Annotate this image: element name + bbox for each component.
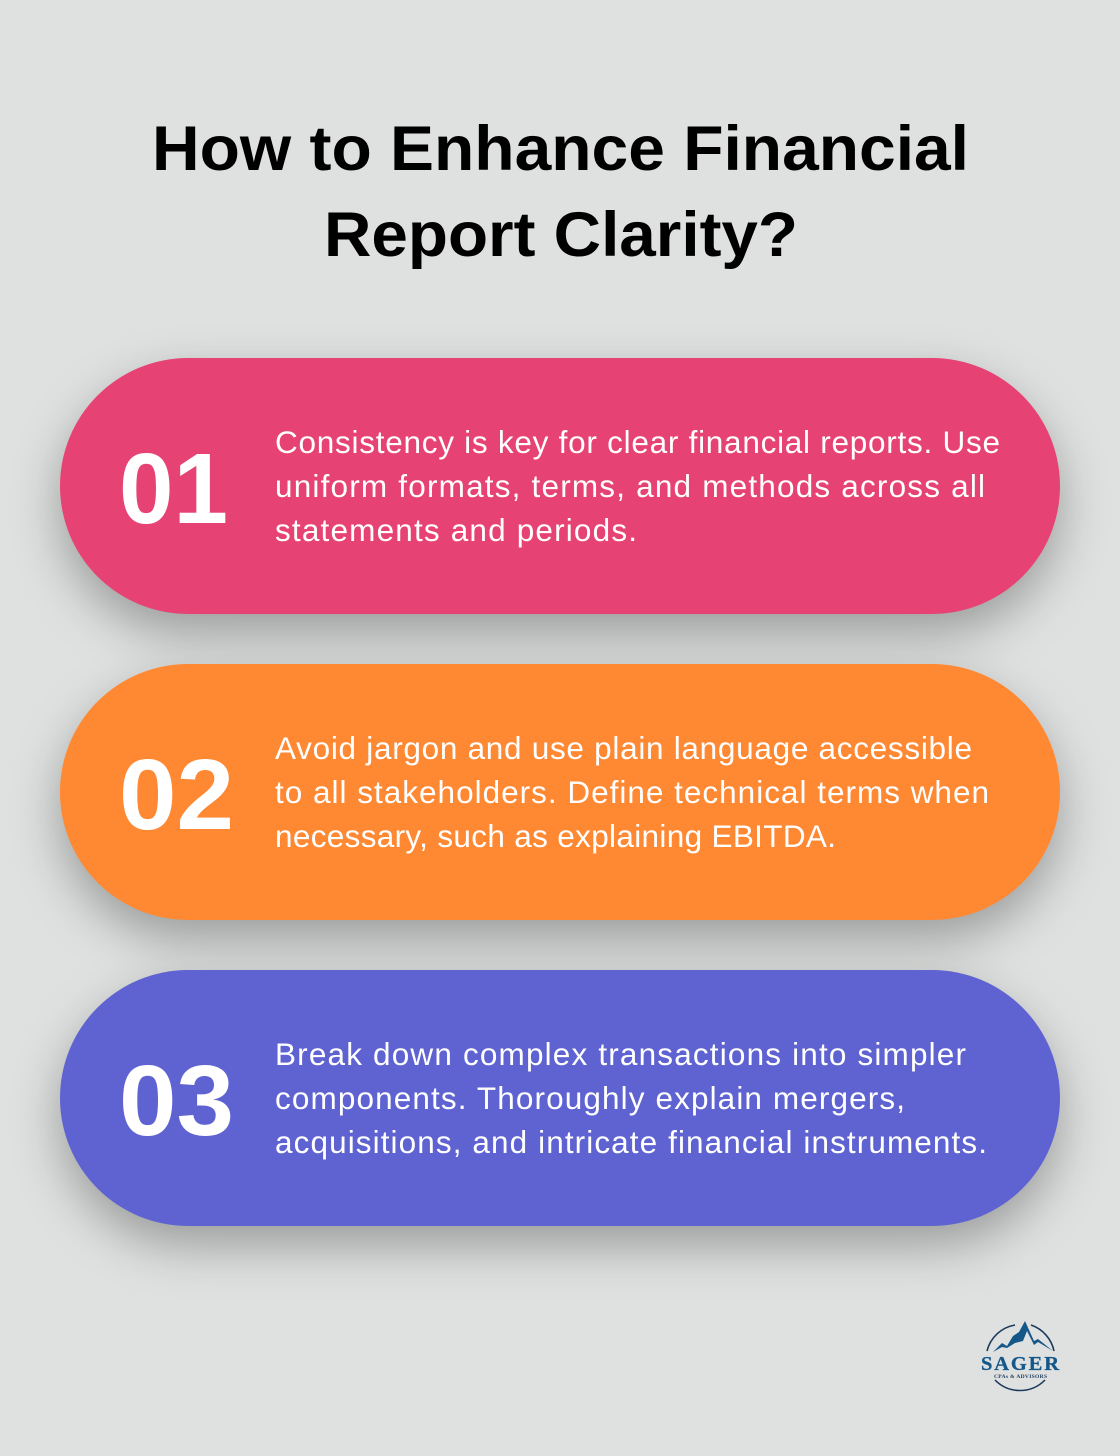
panel: step 02 plain language	[60, 664, 1060, 920]
title: Report Clarity?	[324, 200, 798, 270]
title: How to Enhance Financial	[152, 114, 969, 184]
icon: Sager logo	[981, 1321, 1059, 1391]
icon: Sager logo: SAGER	[981, 1353, 1059, 1375]
text block: step 03: components. Thoroughly explain mergers,	[275, 1080, 905, 1116]
text block: step 03: Break down complex transactions into simpler	[275, 1036, 966, 1072]
text block: step 01: uniform formats, terms, and methods across all	[275, 468, 985, 504]
text block: step 02	[275, 730, 989, 854]
panel: step 03 complex transactions	[60, 970, 1060, 1226]
number: 02: 02	[119, 739, 234, 851]
text block: step 03: acquisitions, and intricate financial instruments.	[275, 1124, 987, 1160]
text block: step 01	[275, 424, 1000, 548]
icon: Sager logo: CPAs & ADVISORS	[994, 1374, 1047, 1380]
pill background: step 02	[60, 664, 1060, 920]
text block: step 03	[275, 1036, 987, 1160]
text block: step 02: to all stakeholders. Define technical terms when	[275, 774, 989, 810]
number: 03: 03	[119, 1045, 234, 1157]
panel: step 01 consistency	[60, 358, 1060, 614]
pill background: step 01	[60, 358, 1060, 614]
text block: step 02: Avoid jargon and use plain language accessible	[275, 730, 972, 766]
text block: step 02: necessary, such as explaining EBITDA.	[275, 818, 836, 854]
title	[152, 114, 969, 270]
text block: step 01: statements and periods.	[275, 512, 637, 548]
text block: step 01: Consistency is key for clear financial reports. Use	[275, 424, 1000, 460]
number: 01: 01	[119, 433, 228, 545]
pill background: step 03	[60, 970, 1060, 1226]
